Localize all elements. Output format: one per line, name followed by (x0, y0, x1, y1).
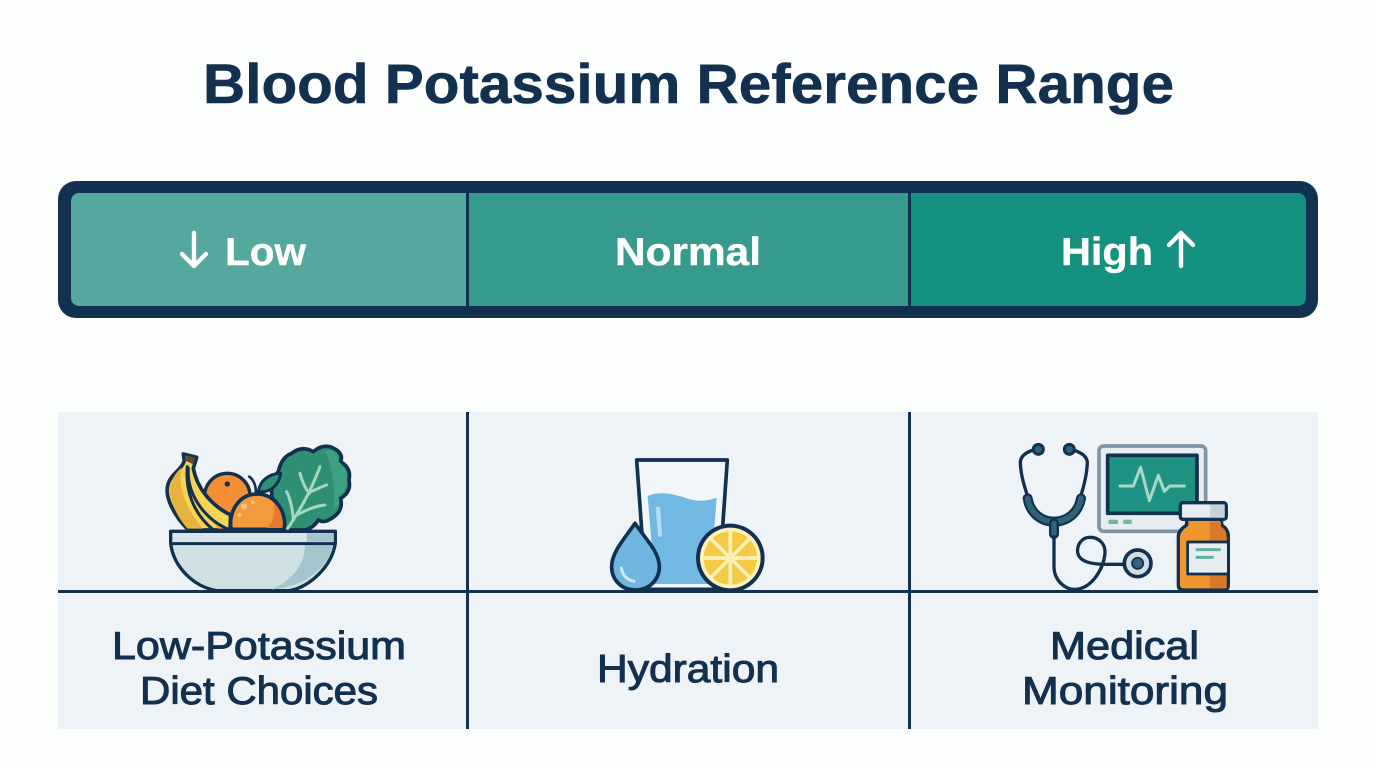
label: high: High (1061, 231, 1153, 274)
segment: high (911, 193, 1306, 306)
label: high (1061, 231, 1193, 274)
caption: diet: Low-Potassium (112, 625, 406, 668)
caption: monitoring: Monitoring (1022, 670, 1228, 713)
label: normal: Normal (615, 231, 761, 274)
drop (612, 523, 659, 590)
caption: diet (112, 625, 406, 713)
icon: fruit and vegetable bowl (167, 446, 350, 591)
range bar (58, 181, 1318, 318)
panel: actions table (58, 412, 1318, 729)
banana (167, 454, 231, 530)
label: low (182, 231, 307, 274)
front orange (231, 494, 285, 529)
icon: glass of water with drop and lemon (612, 460, 765, 592)
bowl (171, 531, 335, 591)
lemon (696, 524, 765, 592)
label: low: Low (225, 231, 307, 274)
stethoscope (1020, 450, 1125, 589)
medicine bottle (1178, 519, 1228, 590)
caption: hydration: Hydration (597, 648, 779, 691)
glass (637, 460, 727, 589)
small leaf and stem (258, 473, 281, 492)
back orange (205, 473, 250, 519)
icon: stethoscope, monitor and medicine bottle (1020, 444, 1228, 590)
monitor (1099, 446, 1206, 531)
water (648, 493, 717, 584)
title: Blood Potassium Reference Range (203, 52, 1174, 115)
caption: diet: Diet Choices (140, 670, 378, 713)
leafy green (272, 446, 350, 530)
segment: normal (469, 193, 908, 306)
caption: monitoring: Medical (1050, 625, 1199, 668)
segment: low (71, 193, 466, 306)
caption: monitoring (1022, 625, 1228, 713)
